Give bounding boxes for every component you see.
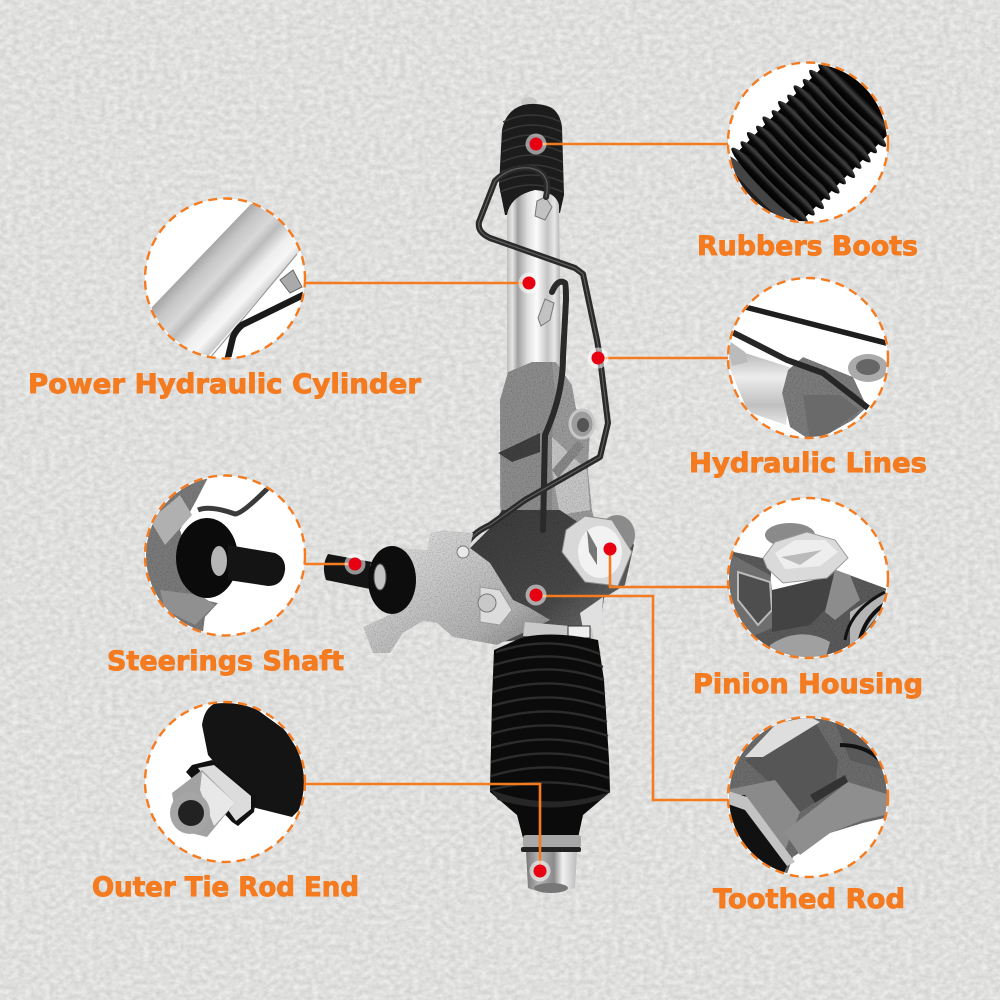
pinion hex plug <box>562 515 635 586</box>
central dark pinion housing <box>470 510 634 642</box>
label: power hydraulic cylinder: Power Hydraulic Cylinder <box>28 369 422 400</box>
close-up: shaft and dust seal <box>146 478 286 632</box>
panel: hydraulic lines <box>720 278 890 440</box>
cast valve housing <box>498 362 600 560</box>
label: steerings shaft: Steerings Shaft <box>107 646 344 677</box>
label: rubbers boots: Rubbers Boots <box>697 231 918 262</box>
dashed ring <box>145 702 305 862</box>
marker dots <box>344 134 616 882</box>
marker: outer tie rod end <box>530 860 550 882</box>
hydraulic fittings <box>535 197 554 326</box>
panel: pinion housing <box>725 498 892 660</box>
marker: power cylinder <box>518 272 540 294</box>
silver valve body <box>363 530 603 653</box>
close-up: lines and housing <box>720 307 890 440</box>
label: pinion housing: Pinion Housing <box>693 669 923 700</box>
connector lines <box>304 144 729 871</box>
dashed ring <box>728 278 888 438</box>
dashed ring <box>145 476 305 636</box>
hydraulic lines <box>465 168 608 548</box>
close-up: housing casting <box>729 718 887 873</box>
dashed ring <box>728 498 888 658</box>
panel: rubbers boots <box>726 61 890 224</box>
marker: hydraulic lines <box>588 348 608 368</box>
valve housing port boss <box>570 410 594 438</box>
marker: rubber boots <box>526 134 546 154</box>
panel: outer tie rod end <box>145 701 306 862</box>
dashed ring <box>145 198 305 358</box>
dashed ring <box>728 717 888 877</box>
marker: toothed rod <box>526 584 546 606</box>
hydraulic cylinder tube <box>507 190 561 374</box>
close-up: silver cylinder <box>152 204 303 358</box>
dashed ring <box>728 62 888 222</box>
label: outer tie rod end: Outer Tie Rod End <box>92 872 359 903</box>
label: hydraulic lines: Hydraulic Lines <box>689 448 927 479</box>
marker: pinion housing <box>604 542 616 556</box>
label: toothed rod: Toothed Rod <box>713 884 905 915</box>
marker: steering shaft <box>344 554 366 574</box>
steering rack product illustration <box>324 97 635 893</box>
panel: steerings shaft <box>140 470 305 640</box>
close-up: nut and boot end <box>170 701 306 837</box>
close-up: hex plug and body <box>725 523 892 660</box>
lower rubber boot <box>490 622 610 838</box>
panel: power hydraulic cylinder <box>144 197 306 360</box>
close-up: ribbed boot <box>730 64 887 222</box>
top rubber boot <box>499 97 564 215</box>
steering shaft <box>324 546 416 614</box>
lower clamp and tie rod nut <box>521 835 581 893</box>
panel: toothed rod <box>725 710 890 885</box>
